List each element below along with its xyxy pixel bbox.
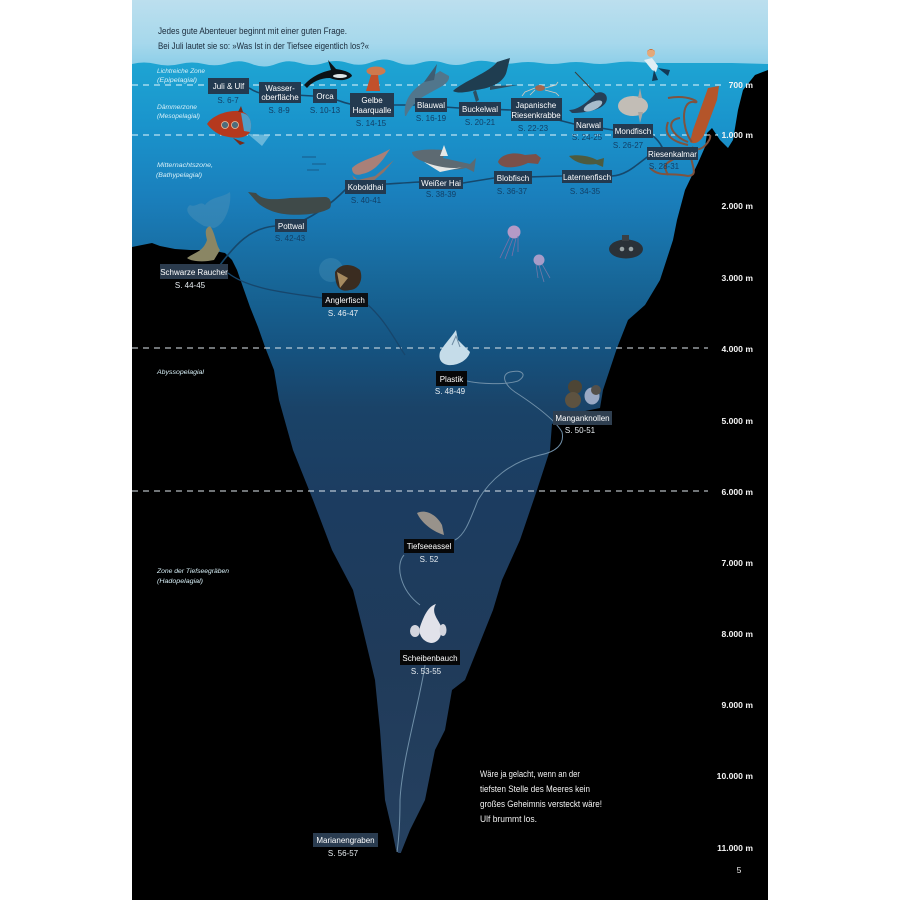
zone labels: Lichtreiche Zone bbox=[157, 68, 205, 75]
label: Weißer Hai bbox=[419, 177, 463, 199]
intro text bbox=[158, 26, 369, 51]
depth scale: 4.000 m bbox=[721, 344, 753, 354]
label: Anglerfisch: S. 46-47 bbox=[328, 309, 359, 318]
label: Juli & Ulf: Juli & Ulf bbox=[213, 82, 245, 91]
label: Riesenkalmar: S. 28-31 bbox=[649, 162, 680, 171]
closing text: Wäre ja gelacht, wenn an der bbox=[480, 769, 580, 779]
label: Narwal: S. 24-25 bbox=[572, 133, 603, 142]
illustration: orca bbox=[304, 60, 352, 88]
label: Blobfisch bbox=[494, 171, 532, 196]
illustration: plastic bag bbox=[439, 330, 470, 365]
label: Buckelwal: S. 20-21 bbox=[465, 118, 496, 127]
label: Mondfisch bbox=[613, 124, 653, 150]
left rock silhouette bbox=[132, 243, 400, 900]
background: ocean water bbox=[132, 60, 768, 870]
label: Buckelwal bbox=[459, 102, 501, 127]
zone labels: (Hadopelagial) bbox=[157, 578, 203, 585]
depth scale bbox=[717, 80, 753, 853]
label: Orca: Orca bbox=[316, 92, 334, 101]
illustration: snailfish bbox=[410, 604, 446, 643]
zone labels: Abyssopelagial bbox=[156, 369, 205, 376]
label: Scheibenbauch bbox=[400, 650, 460, 676]
label: Wasseroberfläche: S. 8-9 bbox=[268, 106, 290, 115]
illustration: jellyfish, Haarqualle bbox=[366, 66, 386, 91]
route line: deep bbox=[397, 371, 563, 852]
label: Japanische Riesenkrabbe: Japanische bbox=[516, 101, 557, 110]
illustration: manganese nodules bbox=[565, 380, 601, 408]
depth scale: 5.000 m bbox=[721, 416, 753, 426]
depth scale: 2.000 m bbox=[721, 201, 753, 211]
label: Schwarze Raucher bbox=[160, 264, 228, 290]
illustration: sperm whale bbox=[248, 192, 331, 215]
zone divider: 4000 m bbox=[132, 347, 708, 349]
label: Wasseroberfläche: Wasser- bbox=[265, 84, 295, 93]
illustration: spider crab bbox=[522, 82, 559, 96]
zone labels: (Mesopelagial) bbox=[157, 113, 200, 120]
label: Laternenfisch: Laternenfisch bbox=[563, 173, 611, 182]
label: Narwal: Narwal bbox=[576, 121, 601, 130]
label: Marianengraben: Marianengraben bbox=[316, 836, 375, 845]
label: Tiefseeassel: Tiefseeassel bbox=[407, 542, 452, 551]
label: Mondfisch: S. 26-27 bbox=[613, 141, 644, 150]
label: Japanische Riesenkrabbe bbox=[511, 98, 562, 133]
depth scale: 1.000 m bbox=[721, 130, 753, 140]
label: Japanische Riesenkrabbe: S. 22-23 bbox=[518, 124, 549, 133]
zone divider: 200 m bbox=[132, 84, 722, 86]
page number: 5 bbox=[737, 865, 742, 875]
depth scale: 10.000 m bbox=[717, 771, 753, 781]
illustration: diver bbox=[644, 49, 670, 81]
illustration: jellyfish, small bbox=[534, 254, 550, 282]
route line: upper bbox=[220, 88, 662, 265]
illustration: narwhal bbox=[569, 72, 607, 114]
label: Tiefseeassel: S. 52 bbox=[420, 555, 439, 564]
label: Blauwal: S. 16-19 bbox=[416, 114, 447, 123]
illustration: black smoker bbox=[187, 192, 230, 261]
intro text: Bei Juli lautet sie so: »Was Ist in der Tiefsee eigentlich los?« bbox=[158, 41, 369, 51]
label: Koboldhai bbox=[345, 180, 386, 205]
label: Gelbe Haarqualle bbox=[350, 93, 394, 128]
label: Weißer Hai: S. 38-39 bbox=[426, 190, 457, 199]
illustration: anglerfish bbox=[319, 258, 361, 291]
closing text: tiefsten Stelle des Meeres kein bbox=[480, 784, 590, 794]
label: Blauwal: Blauwal bbox=[417, 101, 445, 110]
label: Riesenkalmar bbox=[647, 147, 698, 171]
route line: middle bbox=[228, 273, 405, 355]
zone labels: Zone der Tiefseegräben bbox=[156, 568, 229, 575]
label: Pottwal: S. 42-43 bbox=[275, 234, 306, 243]
depth scale: 6.000 m bbox=[721, 487, 753, 497]
label: Schwarze Raucher: Schwarze Raucher bbox=[160, 268, 228, 277]
label: Plastik bbox=[435, 371, 467, 396]
label: Blobfisch: Blobfisch bbox=[497, 174, 529, 183]
label: Gelbe Haarqualle: S. 14-15 bbox=[356, 119, 387, 128]
label: Koboldhai: S. 40-41 bbox=[351, 196, 382, 205]
zone divider: 1000 m bbox=[132, 134, 718, 136]
label: Anglerfisch bbox=[322, 293, 368, 318]
label: Weißer Hai: Weißer Hai bbox=[421, 179, 461, 188]
zone labels: Mitternachtszone, bbox=[157, 162, 213, 169]
label: Koboldhai: Koboldhai bbox=[348, 183, 384, 192]
zone labels: (Epipelagial) bbox=[157, 77, 197, 84]
illustration: humpback whale bbox=[453, 58, 518, 102]
illustration: giant squid bbox=[650, 86, 719, 176]
depth scale: 7.000 m bbox=[721, 558, 753, 568]
label: Schwarze Raucher: S. 44-45 bbox=[175, 281, 206, 290]
label: Pottwal bbox=[275, 219, 307, 243]
label: Plastik: Plastik bbox=[440, 375, 464, 384]
illustration: sunfish bbox=[618, 88, 648, 123]
label: Blobfisch: S. 36-37 bbox=[497, 187, 528, 196]
illustration: deep-sea isopod bbox=[417, 512, 444, 535]
label: Wasseroberfläche: oberfläche bbox=[261, 93, 299, 102]
illustration: jellyfish, pink bbox=[500, 226, 520, 259]
label: Riesenkalmar: Riesenkalmar bbox=[648, 150, 697, 159]
closing text bbox=[480, 769, 602, 824]
depth scale: 3.000 m bbox=[721, 273, 753, 283]
label: Manganknollen: Manganknollen bbox=[555, 414, 610, 423]
label: Anglerfisch: Anglerfisch bbox=[325, 296, 365, 305]
label: Orca: S. 10-13 bbox=[310, 106, 341, 115]
zone labels bbox=[156, 68, 229, 585]
illustration: red submarine bbox=[207, 106, 270, 146]
label: Narwal bbox=[572, 118, 603, 142]
illustration: blobfish bbox=[498, 153, 541, 167]
illustration: blue whale bbox=[405, 64, 449, 116]
zone labels: (Bathypelagial) bbox=[156, 172, 202, 179]
label: Mondfisch: Mondfisch bbox=[615, 127, 651, 136]
depth scale: 9.000 m bbox=[721, 700, 753, 710]
depth scale: 700 m bbox=[729, 80, 753, 90]
label: Scheibenbauch: S. 53-55 bbox=[411, 667, 442, 676]
label: Juli & Ulf bbox=[208, 78, 249, 105]
label: Japanische Riesenkrabbe: Riesenkrabbe bbox=[511, 111, 561, 120]
label: Blauwal bbox=[415, 98, 447, 123]
label: Marianengraben bbox=[313, 833, 378, 858]
label: Tiefseeassel bbox=[404, 539, 454, 564]
illustration: great white shark bbox=[412, 145, 476, 172]
label: Juli & Ulf: S. 6-7 bbox=[217, 96, 239, 105]
illustration: black submarine bbox=[609, 235, 643, 258]
illustration: goblin shark bbox=[352, 149, 394, 182]
label: Orca bbox=[310, 89, 341, 115]
bottom floor of the page bbox=[132, 853, 768, 900]
label: Laternenfisch bbox=[562, 170, 612, 196]
label: Buckelwal: Buckelwal bbox=[462, 105, 498, 114]
label: Pottwal: Pottwal bbox=[278, 222, 304, 231]
depth scale: 8.000 m bbox=[721, 629, 753, 639]
background: sky bbox=[132, 0, 768, 72]
label: Wasseroberfläche bbox=[259, 82, 301, 115]
label: Plastik: S. 48-49 bbox=[435, 387, 466, 396]
label: Manganknollen: S. 50-51 bbox=[565, 426, 596, 435]
closing text: Ulf brummt los. bbox=[480, 814, 537, 824]
label: Gelbe Haarqualle: Haarqualle bbox=[353, 106, 392, 115]
label: Marianengraben: S. 56-57 bbox=[328, 849, 359, 858]
label: Manganknollen bbox=[553, 411, 612, 435]
zone divider: 6000 m bbox=[132, 490, 708, 492]
label: Laternenfisch: S. 34-35 bbox=[570, 187, 601, 196]
illustration: distant fish bbox=[302, 157, 326, 170]
right rock silhouette bbox=[400, 70, 768, 900]
label: Scheibenbauch: Scheibenbauch bbox=[402, 654, 458, 663]
depth scale: 11.000 m bbox=[717, 843, 753, 853]
intro text: Jedes gute Abenteuer beginnt mit einer guten Frage. bbox=[158, 26, 347, 36]
label: Gelbe Haarqualle: Gelbe bbox=[361, 96, 383, 105]
zone labels: Dämmerzone bbox=[157, 104, 197, 111]
illustration: lanternfish bbox=[569, 155, 604, 167]
closing text: großes Geheimnis versteckt wäre! bbox=[480, 799, 602, 809]
